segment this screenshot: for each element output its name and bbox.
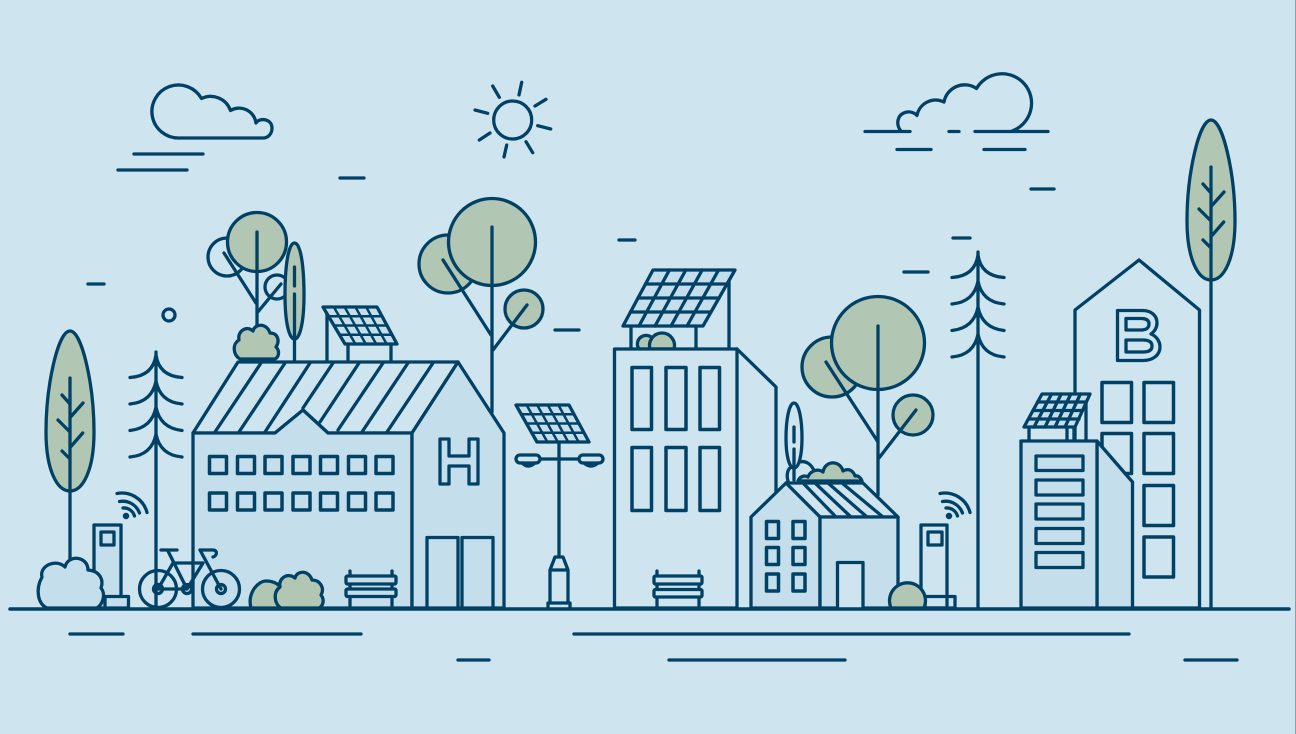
- small house: [751, 483, 898, 608]
- road dashes: [70, 634, 1237, 660]
- solar street lamp: [516, 405, 603, 608]
- tower side wall: [737, 349, 776, 492]
- left bush: [38, 558, 104, 608]
- solar panel on hospital roof: [323, 307, 397, 362]
- left pine tree: [130, 352, 182, 608]
- B letter: [1118, 310, 1160, 360]
- sun: [475, 82, 551, 157]
- round bush by hospital: [250, 581, 284, 608]
- roof bush: [234, 325, 279, 359]
- ground line: [10, 607, 1289, 611]
- lamp base: [548, 557, 570, 608]
- right cloud: [865, 74, 1048, 150]
- solar panel on tower: [623, 270, 735, 349]
- bench right: [654, 571, 702, 608]
- hospital roof: [193, 362, 458, 433]
- tower windows: [632, 368, 720, 510]
- lamp heads: [516, 455, 603, 466]
- charging station left: [94, 525, 128, 608]
- small floating circle: [163, 309, 175, 321]
- charging station right: [921, 525, 955, 608]
- small house body: [820, 517, 898, 608]
- round bush by charger: [890, 583, 926, 608]
- bench left: [346, 571, 396, 608]
- lamp solar panel: [516, 405, 589, 442]
- tower building: [614, 349, 737, 608]
- small house door: [838, 562, 863, 608]
- tiny poplar: [786, 403, 802, 480]
- left poplar tree: [46, 331, 94, 560]
- hospital windows: [210, 456, 393, 510]
- bicycle: [140, 550, 240, 608]
- right poplar tree: [1187, 120, 1235, 608]
- solar panel on low building: [1024, 394, 1090, 441]
- bush behind small house: [798, 463, 862, 481]
- outline shrubs behind small house: [787, 462, 815, 481]
- small house roof: [786, 483, 898, 517]
- hospital H sign: [440, 439, 478, 484]
- small house windows: [766, 522, 805, 591]
- hospital building: [193, 362, 504, 608]
- bush by hospital: [275, 572, 323, 608]
- left cloud: [118, 85, 272, 170]
- small house gable: [751, 483, 820, 608]
- roof tree: [208, 212, 289, 340]
- lamp pole: [557, 442, 561, 556]
- small roof poplar: [285, 243, 304, 362]
- hospital gable: [412, 362, 504, 608]
- tall pine tree: [952, 252, 1004, 608]
- big tree behind small house: [802, 296, 933, 495]
- wifi signal right: [940, 493, 970, 518]
- B building windows: [1102, 382, 1174, 577]
- tall B building: [1075, 260, 1200, 608]
- low building windows: [1036, 456, 1083, 568]
- sky dashes: [88, 178, 1054, 330]
- low building: [1021, 441, 1132, 608]
- wifi signal left: [117, 493, 147, 518]
- tower roof bushes: [637, 333, 675, 349]
- hospital wing: [193, 410, 412, 608]
- big tree behind hospital: [419, 198, 543, 412]
- hospital doors: [427, 538, 493, 608]
